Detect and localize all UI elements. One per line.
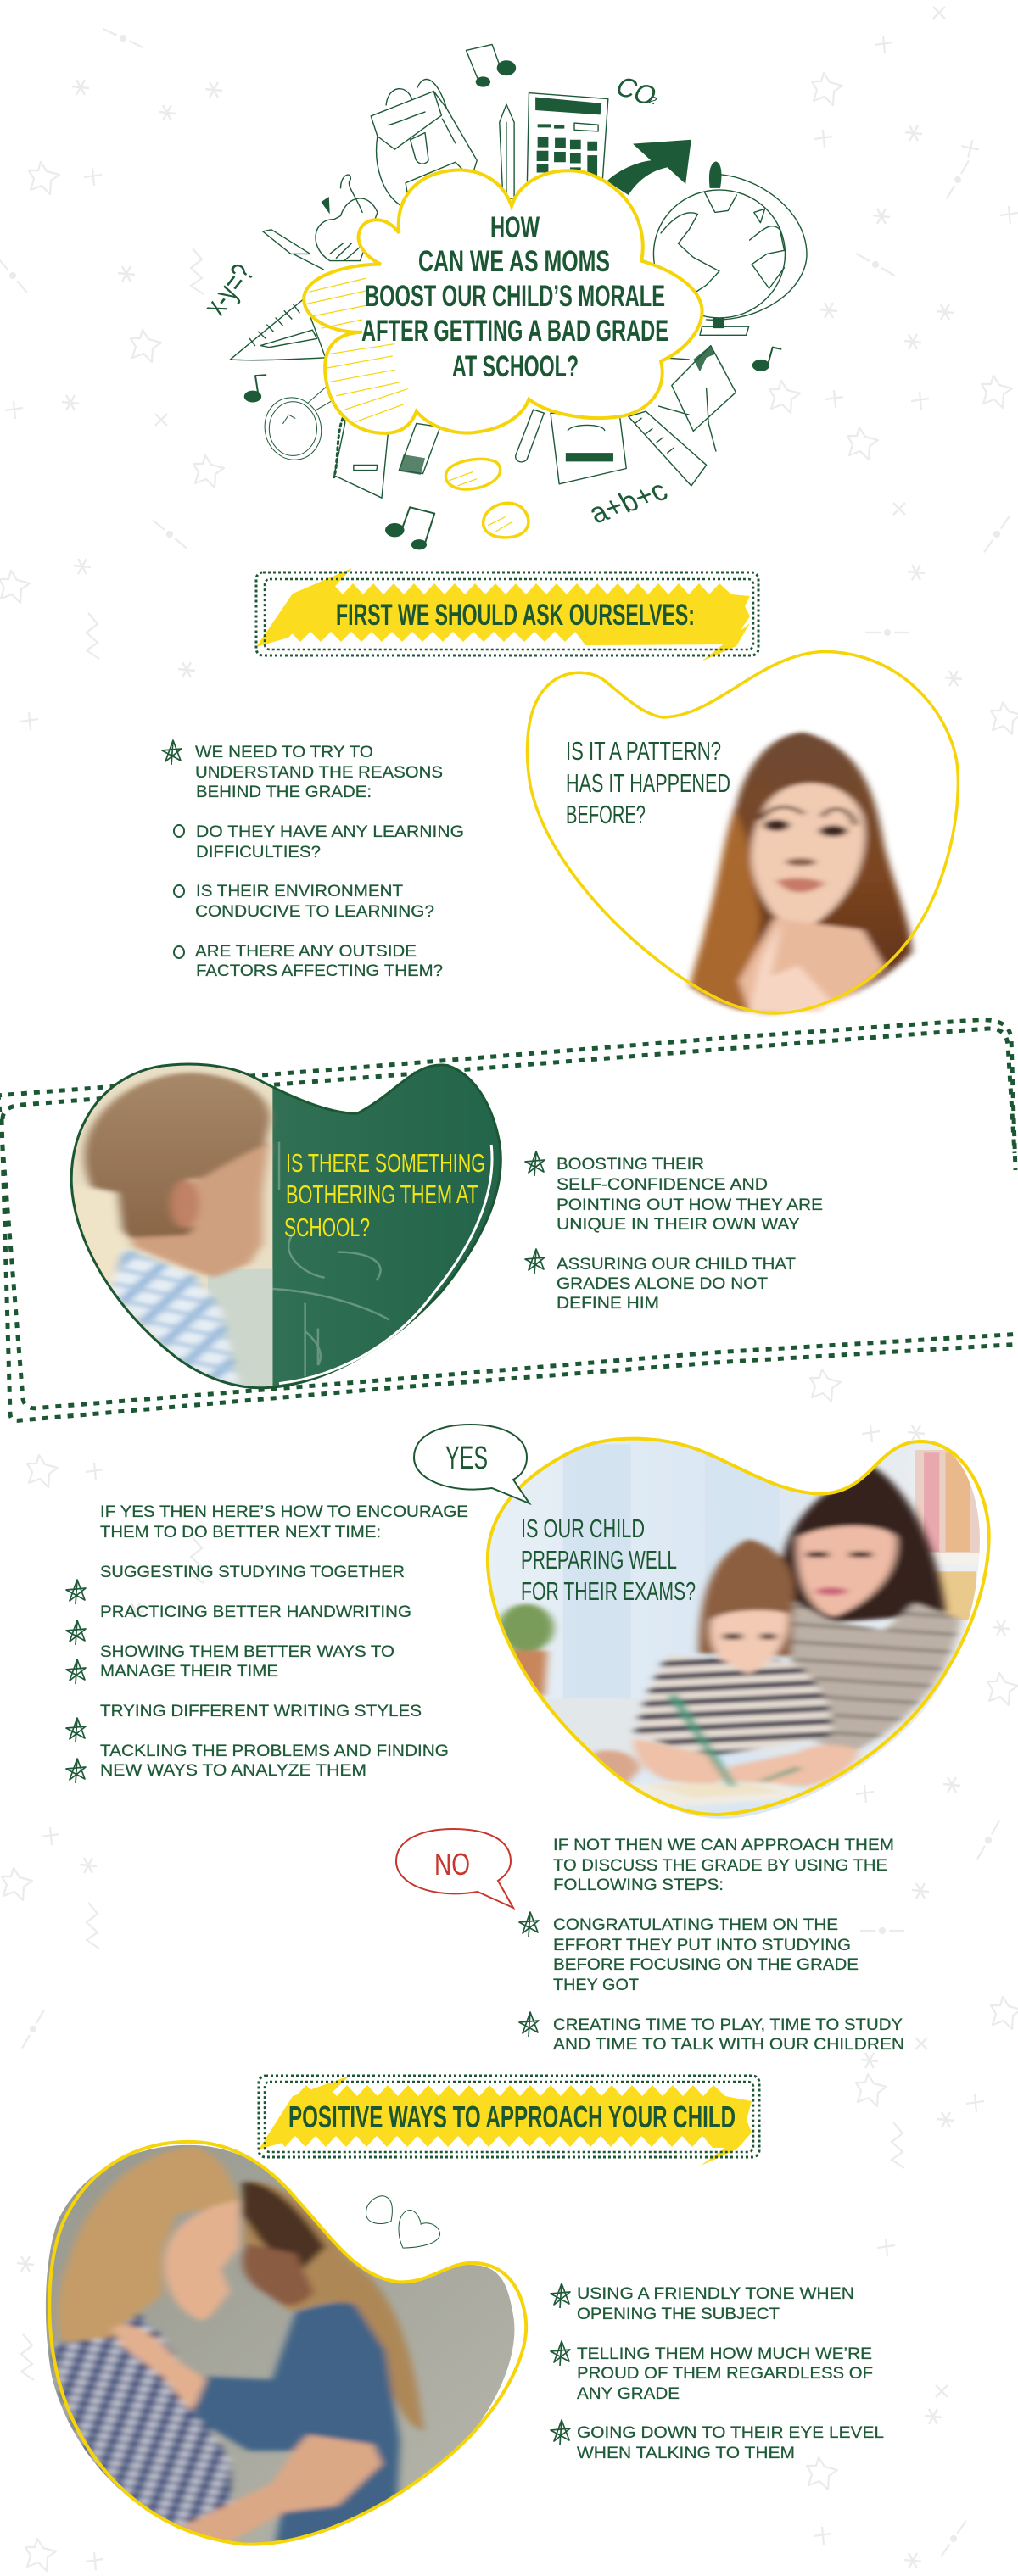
- icon: pen: [263, 230, 323, 270]
- photo: woman: [690, 732, 912, 1014]
- list: if not: EFFORT THEY PUT INTO STUDYING: [553, 1937, 851, 1954]
- icon: set square: [230, 298, 326, 360]
- list: if yes: THEM TO DO BETTER NEXT TIME:: [100, 1524, 381, 1542]
- icon: star bullet: [66, 1759, 86, 1783]
- list: reasons behind the grade: DIFFICULTIES?: [196, 844, 321, 861]
- title: AFTER GETTING A BAD GRADE: [361, 315, 668, 348]
- icon: music note top: [466, 44, 516, 87]
- icon: apple: [316, 175, 378, 261]
- speech bubble: no: NO: [434, 1847, 470, 1882]
- list: if not: BEFORE FOCUSING ON THE GRADE: [553, 1956, 859, 1974]
- title: CAN WE AS MOMS: [418, 245, 610, 278]
- icon: circle bullet two: [174, 885, 184, 897]
- panel: thinking woman: [527, 651, 958, 1014]
- list: if yes: SUGGESTING STUDYING TOGETHER: [100, 1564, 405, 1581]
- banner: first we should ask ourselves: [256, 568, 758, 661]
- icon: music note right: [752, 348, 780, 371]
- list: boosting self-confidence: SELF-CONFIDENCE AND: [557, 1176, 768, 1194]
- icon: star bullet: [551, 2283, 570, 2308]
- list: boosting self-confidence: UNIQUE IN THEIR OWN WAY: [557, 1216, 800, 1234]
- icon: music note left: [244, 375, 266, 403]
- icon: circle bullet one: [174, 825, 184, 837]
- list: boosting self-confidence: DEFINE HIM: [557, 1295, 659, 1313]
- list: reasons behind the grade: FACTORS AFFECTING THEM?: [196, 962, 443, 980]
- icon: circle bullet three: [174, 946, 184, 958]
- title: [361, 211, 668, 383]
- question text: BOTHERING THEM AT: [286, 1179, 478, 1209]
- list: reasons behind the grade: DO THEY HAVE ANY LEARNING: [196, 823, 464, 841]
- question text: SCHOOL?: [284, 1213, 370, 1242]
- list: reasons behind the grade: WE NEED TO TRY TO: [195, 744, 373, 761]
- speech bubble: yes: [414, 1425, 529, 1503]
- icon: star bullet: [66, 1718, 86, 1742]
- list: if not: THEY GOT: [553, 1977, 639, 1994]
- icon: calculator: [527, 93, 608, 181]
- speech bubble: yes: YES: [445, 1441, 488, 1476]
- list: if not: IF NOT THEN WE CAN APPROACH THEM: [553, 1837, 894, 1854]
- list: positive approaches: [551, 2283, 884, 2462]
- icon: magnifying glass: [261, 386, 341, 461]
- list: if yes: IF YES THEN HERE’S HOW TO ENCOURAGE: [100, 1503, 468, 1521]
- icon: star bullet: [162, 740, 182, 765]
- list: if not: TO DISCUSS THE GRADE BY USING THE: [553, 1857, 887, 1875]
- title cloud: [304, 170, 702, 433]
- list: if yes: [66, 1503, 468, 1783]
- text: CO2: CO: [610, 70, 663, 111]
- question text: [566, 736, 730, 829]
- icon: growth arrow: [607, 140, 691, 195]
- list: reasons behind the grade: [162, 740, 464, 980]
- list: reasons behind the grade: BEHIND THE GRADE:: [196, 783, 372, 801]
- icon: book: [334, 416, 389, 498]
- list: positive approaches: OPENING THE SUBJECT: [577, 2306, 780, 2323]
- list: boosting self-confidence: GRADES ALONE DO NOT: [557, 1275, 768, 1293]
- list: if not: FOLLOWING STEPS:: [553, 1876, 724, 1894]
- list: if yes: MANAGE THEIR TIME: [100, 1663, 278, 1681]
- list: positive approaches: USING A FRIENDLY TONE WHEN: [577, 2285, 854, 2303]
- panel: mother and daughter embrace: [34, 2133, 546, 2555]
- list: boosting self-confidence: POINTING OUT HOW THEY ARE: [557, 1196, 823, 1214]
- icon: star bullet: [525, 1249, 545, 1274]
- icon: hearts: [366, 2196, 440, 2248]
- panel: mother and daughter studying: [483, 1433, 995, 1823]
- text: a+b+c: a+b+c: [583, 475, 674, 530]
- icon: star bullet: [525, 1151, 545, 1176]
- question text: IS THERE SOMETHING: [286, 1148, 485, 1178]
- icon: star bullet: [551, 2341, 570, 2366]
- question text: PREPARING WELL: [521, 1545, 677, 1575]
- question text: [521, 1514, 696, 1606]
- list: boosting self-confidence: ASSURING OUR CHILD THAT: [557, 1256, 796, 1274]
- list: positive approaches: TELLING THEM HOW MUCH WE’RE: [577, 2345, 872, 2363]
- text: x-y=?: x-y=?: [195, 259, 262, 320]
- question text: IS OUR CHILD: [521, 1514, 645, 1543]
- banner: positive ways: [259, 2076, 759, 2166]
- list: if yes: PRACTICING BETTER HANDWRITING: [100, 1603, 411, 1621]
- panel: boy at blackboard: [65, 1060, 512, 1391]
- list: positive approaches: WHEN TALKING TO THEM: [577, 2445, 795, 2462]
- list: if yes: SHOWING THEM BETTER WAYS TO: [100, 1643, 394, 1661]
- photo: boy: [65, 1060, 512, 1391]
- icon: star bullet: [66, 1580, 86, 1604]
- icon: star bullet: [551, 2420, 570, 2445]
- list: boosting self-confidence: BOOSTING THEIR: [557, 1156, 704, 1174]
- list: if yes: TRYING DIFFERENT WRITING STYLES: [100, 1703, 422, 1720]
- list: if not: CREATING TIME TO PLAY, TIME TO STUDY: [553, 2016, 903, 2034]
- list: positive approaches: PROUD OF THEM REGARDLESS OF: [577, 2365, 873, 2383]
- icon: pencil: [500, 104, 514, 202]
- title: HOW: [490, 211, 540, 244]
- icon: star bullet: [519, 1912, 539, 1937]
- list: reasons behind the grade: UNDERSTAND THE REASONS: [195, 764, 443, 782]
- banner heading: FIRST WE SHOULD ASK OURSELVES:: [336, 599, 695, 632]
- icon: star bullet: [519, 2012, 539, 2037]
- list: boosting self-confidence: [525, 1151, 823, 1313]
- thought bubble large: [445, 459, 501, 489]
- header doodle illustration: [195, 44, 807, 549]
- list: if not: CONGRATULATING THEM ON THE: [553, 1916, 838, 1934]
- question text: BEFORE?: [566, 800, 646, 829]
- list: if not: AND TIME TO TALK WITH OUR CHILDREN: [553, 2036, 904, 2054]
- heart outline: [527, 651, 958, 1013]
- list: reasons behind the grade: CONDUCIVE TO LEARNING?: [195, 903, 434, 921]
- icon: star bullet: [66, 1620, 86, 1645]
- thought bubble small: [484, 503, 529, 538]
- title: BOOST OUR CHILD’S MORALE: [365, 280, 665, 313]
- list: reasons behind the grade: ARE THERE ANY OUTSIDE: [195, 943, 417, 961]
- question text: IS IT A PATTERN?: [566, 736, 721, 766]
- dotted tilted frame: [0, 1020, 1018, 1420]
- photo: embrace: [34, 2133, 546, 2555]
- list: if yes: TACKLING THE PROBLEMS AND FINDING: [100, 1742, 449, 1760]
- icon: pencil bottom: [516, 410, 544, 462]
- title: AT SCHOOL?: [452, 350, 579, 383]
- icon: graduation cap: [659, 346, 736, 451]
- photo: studying: [483, 1433, 995, 1823]
- icon: star bullet: [66, 1659, 86, 1684]
- text: CO2: 2: [646, 93, 660, 107]
- list: positive approaches: ANY GRADE: [577, 2385, 680, 2403]
- list: if yes: NEW WAYS TO ANALYZE THEM: [100, 1762, 366, 1780]
- icon: backpack: [371, 79, 477, 207]
- icon: paint brush: [399, 423, 440, 475]
- icon: music note bottom: [385, 507, 434, 549]
- question text: [284, 1148, 485, 1242]
- icon: notebook: [551, 413, 626, 484]
- icon: globe: [653, 161, 807, 335]
- banner heading: POSITIVE WAYS TO APPROACH YOUR CHILD: [288, 2099, 736, 2134]
- icon: ruler: [629, 411, 707, 486]
- question text: HAS IT HAPPENED: [566, 768, 730, 798]
- list: reasons behind the grade: IS THEIR ENVIRONMENT: [196, 883, 403, 900]
- question text: FOR THEIR EXAMS?: [521, 1576, 696, 1606]
- list: positive approaches: GOING DOWN TO THEIR EYE LEVEL: [577, 2424, 884, 2442]
- list: if not: [519, 1837, 904, 2054]
- speech bubble: no: [396, 1829, 513, 1908]
